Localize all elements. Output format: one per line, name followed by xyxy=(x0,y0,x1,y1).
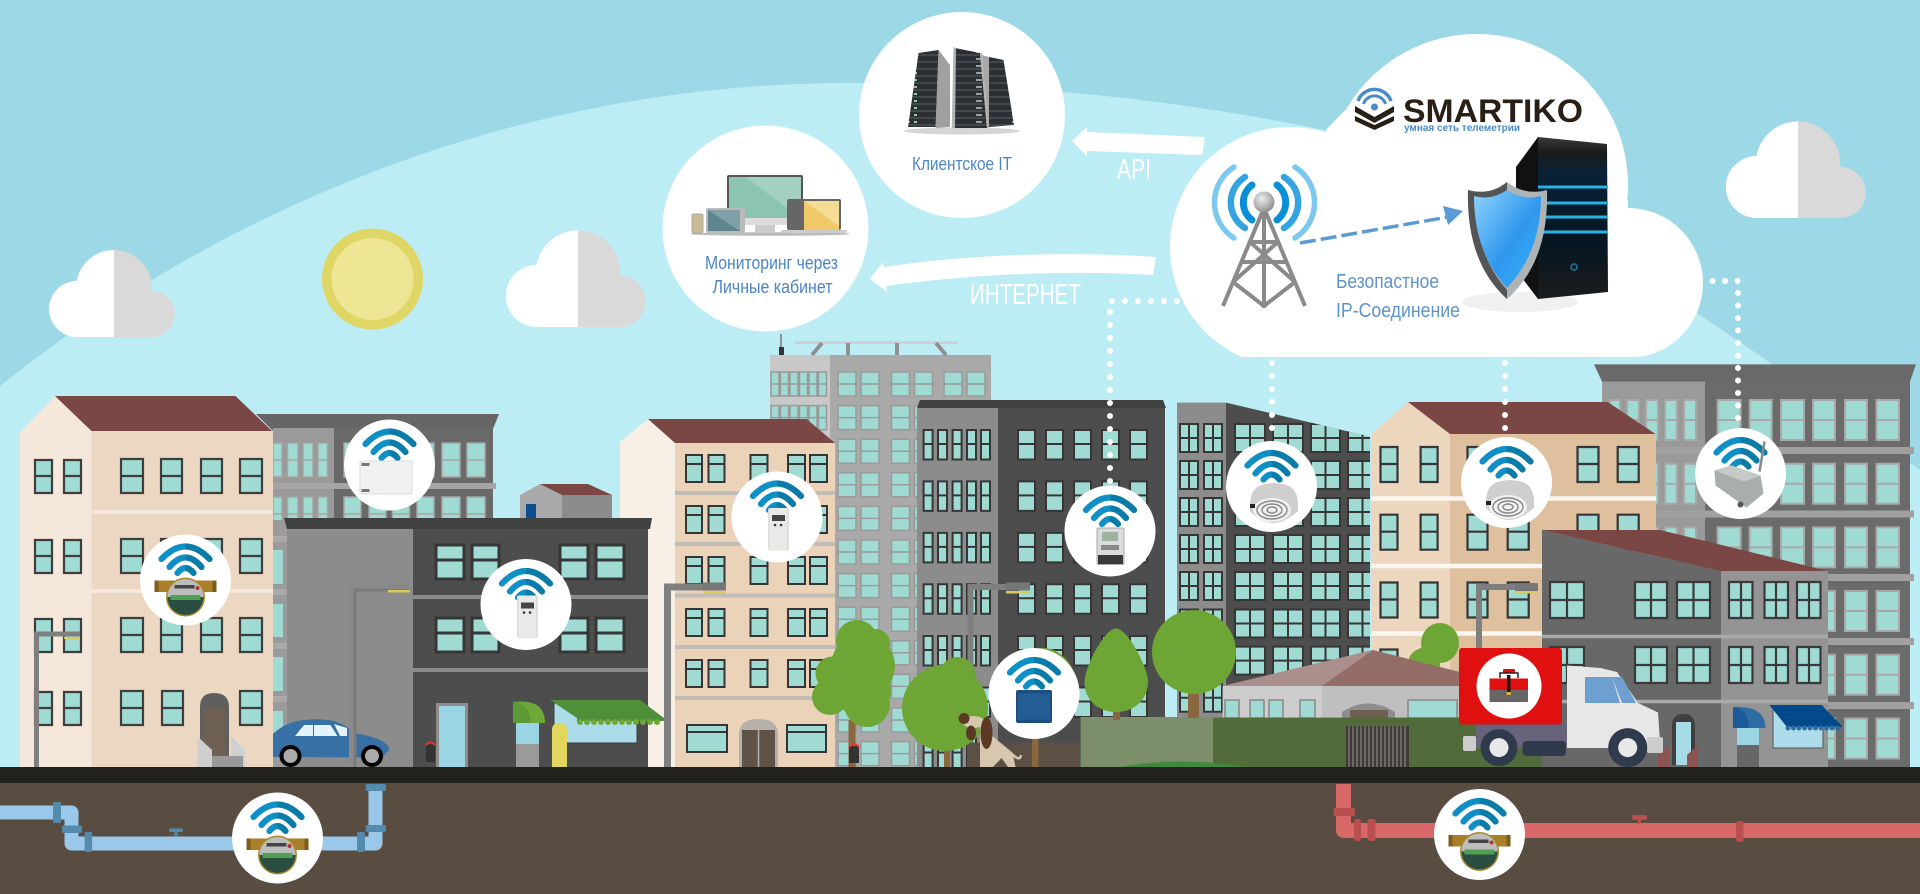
logo icon xyxy=(1355,89,1394,130)
earth ground xyxy=(0,783,1920,894)
text: monitoring: Личные кабинет xyxy=(712,276,833,297)
car xyxy=(273,719,389,767)
arrow: API xyxy=(1072,127,1205,156)
panel: monitoring xyxy=(662,126,868,332)
icon: radio tower xyxy=(1214,167,1315,308)
sensor: blue box xyxy=(988,648,1080,739)
logo tagline: умная сеть телеметрии xyxy=(1404,122,1520,134)
cloud middle xyxy=(506,230,646,327)
dotted connection: gateway to cloud xyxy=(1700,281,1738,428)
text: secure IP connection: Безопастное xyxy=(1336,271,1439,293)
trash bin xyxy=(849,744,859,763)
building: dark centre xyxy=(917,400,1166,768)
text: secure IP connection xyxy=(1336,271,1460,322)
small rooftop house xyxy=(520,484,612,518)
street lamp 3 xyxy=(668,582,726,767)
building: beige centre xyxy=(620,419,835,768)
building: tall grey tower xyxy=(770,334,991,767)
text: client IT: Клиентское IT xyxy=(912,154,1012,174)
building: tan right xyxy=(1371,402,1656,767)
text: monitoring: Мониторинг через xyxy=(705,252,838,273)
sensor: smoke detector 2 xyxy=(1461,437,1552,528)
sensor: water meter house xyxy=(140,534,231,626)
cloud right xyxy=(1726,121,1866,218)
building: dark front left xyxy=(284,518,664,767)
red water pipe xyxy=(1334,784,1920,842)
truck box with toolbox icon xyxy=(1459,648,1562,724)
blue water pipe xyxy=(0,784,386,852)
sensor: radio gateway xyxy=(1695,428,1786,519)
sensor: smoke detector 1 xyxy=(1226,441,1317,532)
sensor: water meter cold pipe xyxy=(232,792,323,884)
sensor: electricity meter xyxy=(1064,486,1156,576)
logo wordmark: SMARTIKO xyxy=(1403,93,1583,129)
text: secure IP connection: IP-Соединение xyxy=(1336,300,1460,322)
dotted connection: smart meter to cloud xyxy=(1110,301,1190,485)
street lamp 2 xyxy=(352,583,410,767)
label: internet: ИНТЕРНЕТ xyxy=(970,279,1081,311)
low house xyxy=(1223,650,1460,730)
dotted connection: smoke sensor 1 to cloud xyxy=(1269,350,1275,441)
building: grey front right xyxy=(1542,530,1842,767)
tree 4 xyxy=(1084,628,1148,720)
road xyxy=(0,767,1920,783)
icon: devices xyxy=(690,175,850,236)
sensor: water meter hot pipe xyxy=(1434,789,1525,880)
smartiko logo xyxy=(1355,89,1583,134)
building: back grey left xyxy=(256,414,499,767)
street lamp 4 xyxy=(1479,583,1538,648)
tree 3 xyxy=(1009,648,1077,768)
panel: client IT xyxy=(859,12,1065,218)
arrow: internet xyxy=(870,254,1156,292)
tree behind house xyxy=(1408,623,1459,680)
dog xyxy=(958,713,1021,767)
label: API: API xyxy=(1117,154,1151,186)
hedge and gate xyxy=(1081,717,1542,768)
dashed arrow: secure connection xyxy=(1300,206,1463,243)
icon: server with shield xyxy=(1462,137,1608,312)
sensor: white gateway box xyxy=(344,420,435,510)
text: monitoring xyxy=(705,252,838,297)
tree 2 xyxy=(902,657,988,768)
building: dark slanted xyxy=(1177,402,1370,718)
tree 5 xyxy=(1152,610,1236,718)
building: back grey right xyxy=(1594,364,1916,767)
icon: server racks xyxy=(904,47,1020,134)
sensor: heat meter xyxy=(480,559,572,650)
delivery truck xyxy=(1463,666,1663,767)
tree 1 xyxy=(812,620,895,768)
sensor: heat meter centre xyxy=(732,472,822,562)
sun xyxy=(322,228,423,330)
cloud left xyxy=(49,250,175,337)
street lamp 1 xyxy=(36,634,80,767)
dotted connection: smoke sensor 2 to cloud xyxy=(1502,350,1508,437)
building: beige left xyxy=(20,396,273,767)
big smartiko cloud xyxy=(1170,34,1703,367)
